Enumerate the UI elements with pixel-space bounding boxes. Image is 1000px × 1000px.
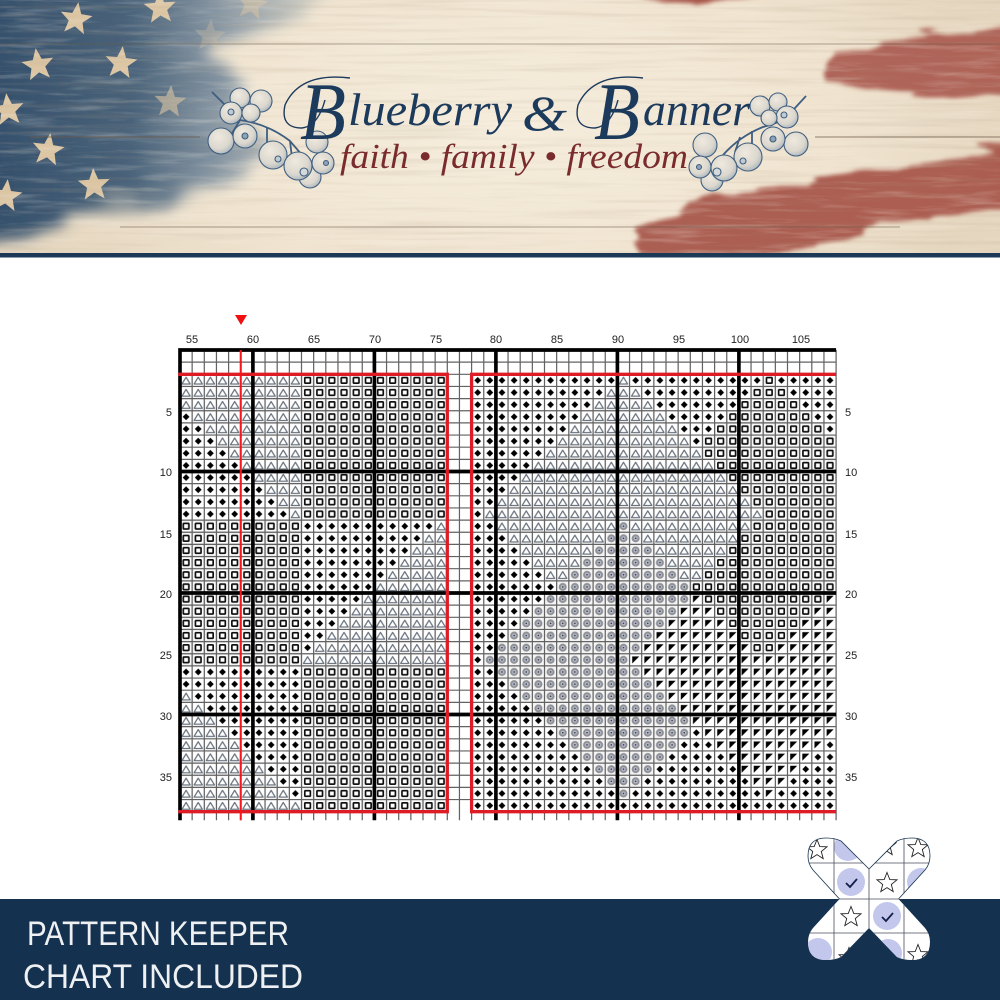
- icon: Pattern Keeper X logo: [808, 838, 930, 960]
- chart left row numbers: 25: [160, 650, 172, 662]
- chart column numbers: 80: [490, 334, 502, 346]
- symbol region: squares: [180, 374, 836, 812]
- logo flourishes: [284, 77, 643, 128]
- chart left row numbers: 10: [160, 467, 172, 479]
- chart left row numbers: 35: [160, 772, 172, 784]
- chart column numbers: [186, 334, 810, 346]
- banner bottom rule: [0, 253, 1000, 258]
- footer text: [23, 915, 303, 996]
- chart right row numbers: [845, 407, 857, 784]
- chart right row numbers: 15: [845, 529, 857, 541]
- symbol region: diamonds: [180, 374, 836, 812]
- symbol region: triangles: [180, 374, 763, 812]
- chart column numbers: 95: [673, 334, 685, 346]
- logo: right berry cluster: [689, 93, 808, 191]
- chart column numbers: 55: [186, 334, 198, 346]
- logo title: &: [522, 85, 567, 141]
- chart right row numbers: 20: [845, 589, 857, 601]
- footer text: PATTERN KEEPER: [27, 915, 289, 953]
- chart column numbers: 60: [247, 334, 259, 346]
- logo: left berry cluster: [208, 88, 334, 188]
- chart right row numbers: 25: [845, 650, 857, 662]
- chart column numbers: 85: [551, 334, 563, 346]
- red page boundaries: [178, 374, 836, 812]
- banner: rustic wood flag: [0, 0, 1000, 262]
- red centre column line: [240, 350, 242, 820]
- chart right row numbers: 35: [845, 772, 857, 784]
- chart column numbers: 75: [430, 334, 442, 346]
- chart column numbers: 65: [308, 334, 320, 346]
- footer text: CHART INCLUDED: [23, 958, 303, 996]
- chart right row numbers: 5: [845, 407, 851, 419]
- footer bar: [0, 899, 1000, 1000]
- thick grid lines: [178, 348, 836, 820]
- chart column numbers: 70: [369, 334, 381, 346]
- chart left row numbers: 30: [160, 711, 172, 723]
- cross stitch chart grid: [178, 348, 836, 820]
- chart left row numbers: 5: [166, 407, 172, 419]
- chart right row numbers: 30: [845, 711, 857, 723]
- chart column numbers: 90: [612, 334, 624, 346]
- symbol region: black wedges: [630, 593, 836, 800]
- chart column numbers: 100: [731, 334, 749, 346]
- chart left row numbers: [160, 407, 172, 784]
- chart right row numbers: 10: [845, 467, 857, 479]
- logo title: B: [300, 66, 346, 157]
- chart marker: red arrow: [235, 315, 247, 325]
- logo title: anner: [643, 84, 751, 135]
- chart left row numbers: 15: [160, 529, 172, 541]
- logo title: [300, 66, 751, 157]
- logo tagline: faith • family • freedom: [340, 137, 688, 176]
- logo title: lueberry: [348, 84, 513, 135]
- chart column numbers: 105: [792, 334, 810, 346]
- symbol region: grey circles: [484, 520, 690, 800]
- logo title: B: [594, 66, 640, 157]
- chart left row numbers: 20: [160, 589, 172, 601]
- thin grid lines: [180, 350, 836, 820]
